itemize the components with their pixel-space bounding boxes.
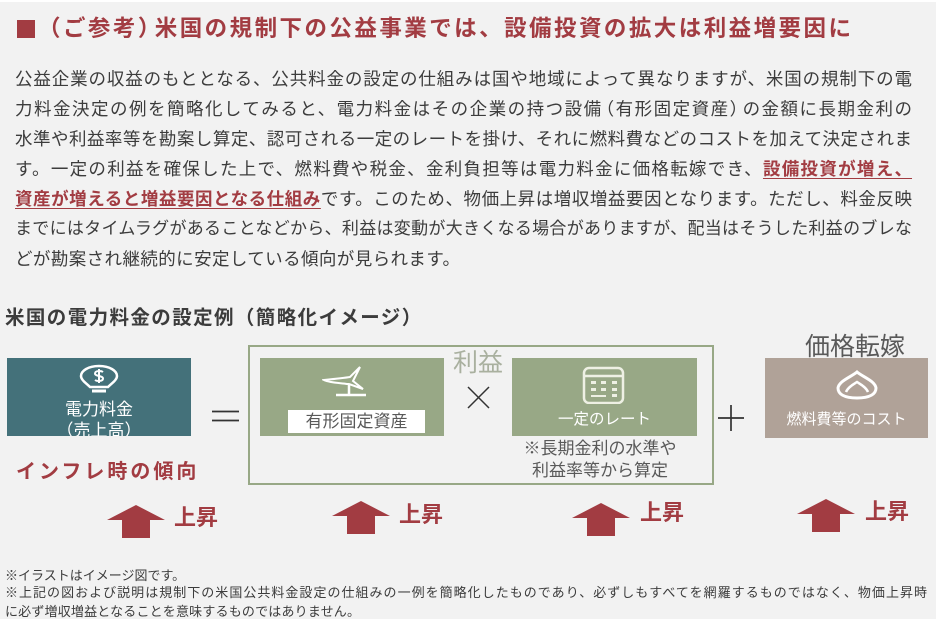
label: tangible fixed assets: 有形固定資産 [306,412,408,431]
label: fixed rate: 一定のレート [558,411,651,428]
arrow: rate rises [107,505,165,538]
icon: calculator calendar [582,366,624,404]
label: price pass-through: 価格転嫁 [805,333,905,361]
panel: electricity rate [7,358,191,436]
note: rate basis [524,439,676,480]
title: （ご参考）米国の規制下の公益事業では、設備投資の拡大は利益増要因に [38,16,851,41]
label: tangible fixed assets [288,410,425,433]
text block: explanation: 力料金決定の例を簡略化してみると、電力料金はその企業の持つ設備（有形固定資産）の金額に長期金利の [15,99,912,119]
label: rises 3: 上昇 [640,500,684,525]
text block: explanation: までにはタイムラグがあることなどから、利益は変動が大きくなる場合がありますが、配当はそうした利益のブレな [15,219,912,238]
label: profit: 利益 [453,349,503,377]
arrow: assets rise [332,501,390,534]
plus sign [718,405,744,431]
label: rises 1: 上昇 [174,505,218,530]
footnotes: に必ず増収増益となることを意味するものではありません。 [5,604,360,619]
note: rate basis: 利益率等から算定 [532,461,668,480]
arrow: fuel costs rise [797,499,855,532]
icon: flame [836,370,878,400]
label: rises 4: 上昇 [865,499,909,524]
label: electricity rate [56,400,142,436]
text block: explanation: す。一定の利益を確保した上で、燃料費や税金、金利負担等は電力料金に価格転嫁でき、設備投資が増え、 [15,159,912,179]
footnotes [5,568,927,619]
text block: explanation: 公益企業の収益のもととなる、公共料金の設定の仕組みは国や地域によって異なりますが、米国の規制下の電 [15,69,912,89]
text block: explanation: 水準や利益率等を勘案し算定、認可される一定のレートを掛け、それに燃料費などのコストを加えて決定されま [15,129,912,149]
label: rises 2: 上昇 [399,502,443,527]
text block: explanation: 資産が増えると増益要因となる仕組みです。このため、物価上昇は増収増益要因となります。ただし、料金反映 [15,189,912,209]
note: rate basis: ※長期金利の水準や [524,439,676,458]
multiply sign [468,386,490,408]
arrow: fixed rate rises [572,503,630,536]
equals sign [212,410,239,422]
text block: explanation: どが勘案され継続的に安定している傾向が見られます。 [15,249,460,269]
icon: asset [322,366,366,396]
label: electricity rate: 電力料金 [65,400,133,419]
panel: tangible fixed assets [260,358,444,436]
footnotes: ※イラストはイメージ図です。 [5,568,185,583]
label: inflation trend: インフレ時の傾向 [16,461,199,483]
text block: explanation [15,69,912,269]
panel: fixed rate [512,358,697,436]
icon: light bulb with dollar [80,364,118,392]
label: fuel costs: 燃料費等のコスト [786,411,906,428]
heading: diagram: 米国の電力料金の設定例（簡略化イメージ） [5,307,423,329]
panel: profit frame [248,345,714,485]
footnotes: ※上記の図および説明は規制下の米国公共料金設定の仕組みの一例を簡略化したものであり、必ずしもすべてを網羅するものではなく、物価上昇時 [5,585,927,600]
title marker square [17,20,35,38]
panel: fuel costs [765,358,928,438]
